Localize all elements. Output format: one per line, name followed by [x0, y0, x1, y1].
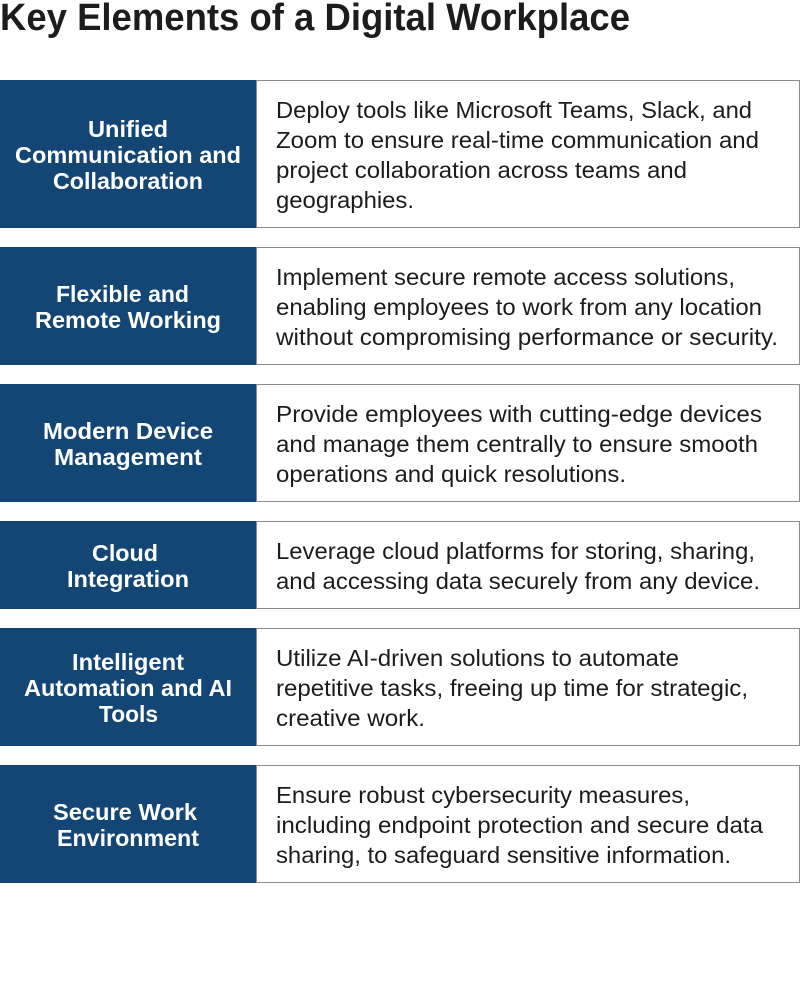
- description: cloud integration: and accessing data securely from any device.: [276, 568, 760, 594]
- description: secure work environment: [276, 782, 764, 868]
- label: cloud integration: Integration: [67, 566, 189, 592]
- description: flexible and remote working: Implement secure remote access solutions,: [276, 264, 735, 290]
- description: intelligent automation and ai tools: Utilize AI-driven solutions to automate: [276, 645, 679, 671]
- description: modern device management: Provide employees with cutting-edge devices: [276, 401, 762, 427]
- label: flexible and remote working: [35, 281, 221, 333]
- panel: secure work environment: [0, 765, 800, 883]
- panel: unified communication and collaboration: [0, 80, 800, 228]
- description: secure work environment: including endpoint protection and secure data: [276, 812, 764, 838]
- label: flexible and remote working: Remote Working: [35, 307, 221, 333]
- description: modern device management: [276, 401, 762, 487]
- description: intelligent automation and ai tools: creative work.: [276, 705, 425, 731]
- label: intelligent automation and ai tools: Automation and AI: [24, 675, 232, 701]
- label: secure work environment: Environment: [57, 825, 199, 851]
- description: unified communication and collaboration: project collaboration across teams and: [276, 157, 687, 183]
- description: flexible and remote working: without compromising performance or security.: [275, 324, 778, 350]
- label: unified communication and collaboration: [15, 116, 241, 194]
- description: intelligent automation and ai tools: [276, 645, 748, 731]
- description: cloud integration: [276, 538, 760, 594]
- label: intelligent automation and ai tools: Tools: [99, 701, 158, 727]
- label: modern device management: Management: [54, 444, 202, 470]
- description: unified communication and collaboration: Deploy tools like Microsoft Teams, Slack, and: [276, 97, 752, 123]
- label: flexible and remote working: Flexible and: [56, 281, 189, 307]
- description: intelligent automation and ai tools: repetitive tasks, freeing up time for strategic,: [276, 675, 748, 701]
- description: unified communication and collaboration: geographies.: [276, 187, 414, 213]
- description: unified communication and collaboration: [276, 97, 759, 213]
- label: intelligent automation and ai tools: [24, 649, 232, 727]
- label: secure work environment: [53, 799, 199, 851]
- label: secure work environment: Secure Work: [53, 799, 198, 825]
- label: intelligent automation and ai tools: Intelligent: [72, 649, 184, 675]
- label: modern device management: Modern Device: [43, 418, 213, 444]
- panel: cloud integration: [0, 521, 800, 609]
- description: secure work environment: Ensure robust cybersecurity measures,: [276, 782, 690, 808]
- panel: flexible and remote working: [0, 247, 800, 365]
- description: unified communication and collaboration: Zoom to ensure real-time communication and: [276, 127, 759, 153]
- panel: intelligent automation and ai tools: [0, 628, 800, 746]
- label: unified communication and collaboration: Collaboration: [53, 168, 203, 194]
- description: flexible and remote working: [275, 264, 778, 350]
- description: modern device management: and manage them centrally to ensure smooth: [276, 431, 758, 457]
- label: cloud integration: [67, 540, 189, 592]
- description: flexible and remote working: enabling employees to work from any location: [276, 294, 762, 320]
- label: cloud integration: Cloud: [92, 540, 158, 566]
- description: modern device management: operations and quick resolutions.: [276, 461, 626, 487]
- panel: modern device management: [0, 384, 800, 502]
- label: unified communication and collaboration: Unified: [88, 116, 168, 142]
- label: unified communication and collaboration: Communication and: [15, 142, 241, 168]
- label: modern device management: [43, 418, 213, 470]
- description: cloud integration: Leverage cloud platforms for storing, sharing,: [276, 538, 755, 564]
- description: secure work environment: sharing, to safeguard sensitive information.: [276, 842, 731, 868]
